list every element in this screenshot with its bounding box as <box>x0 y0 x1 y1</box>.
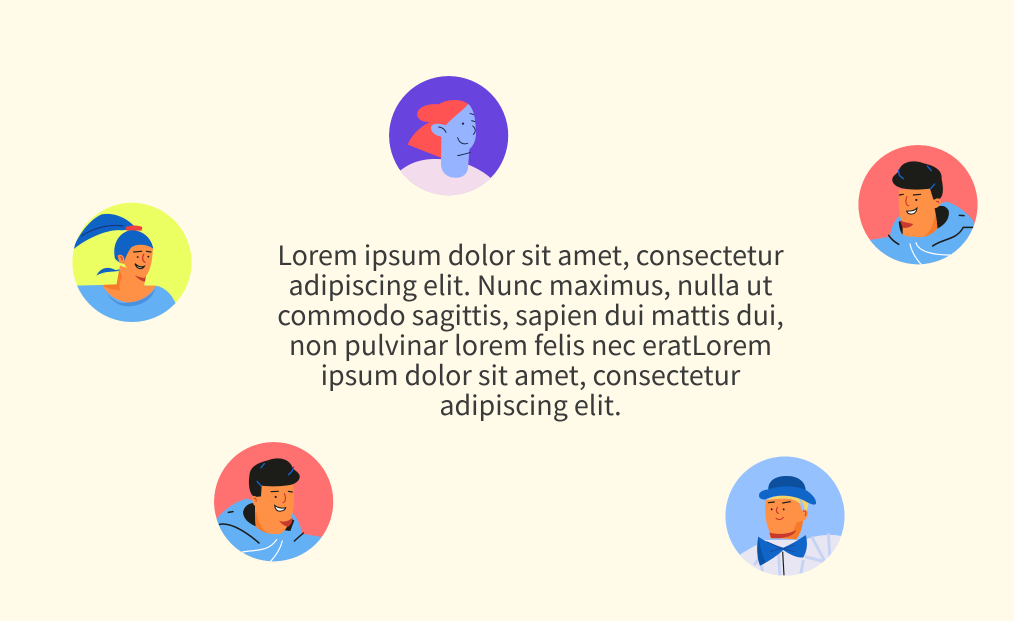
avatar: man with black quiff on coral, facing left <box>858 145 980 270</box>
body text: Lorem ipsum dolor sit amet, consectetur <box>277 234 784 273</box>
body text: commodo sagittis, sapien dui mattis dui, <box>277 294 784 333</box>
avatar: man with black quiff on coral, facing right <box>212 442 333 567</box>
avatar: man with blue bowler hat and bow tie <box>725 456 848 583</box>
body text <box>277 234 784 423</box>
body text: ipsum dolor sit amet, consectetur <box>321 354 740 393</box>
avatar: woman with blue ponytail on yellow <box>72 203 192 330</box>
body text: adipiscing elit. <box>439 384 622 423</box>
body text: non pulvinar lorem felis nec eratLorem <box>289 324 772 363</box>
body text: adipiscing elit. Nunc maximus, nulla ut <box>288 264 772 303</box>
avatar: woman with red hair on purple <box>389 76 508 200</box>
